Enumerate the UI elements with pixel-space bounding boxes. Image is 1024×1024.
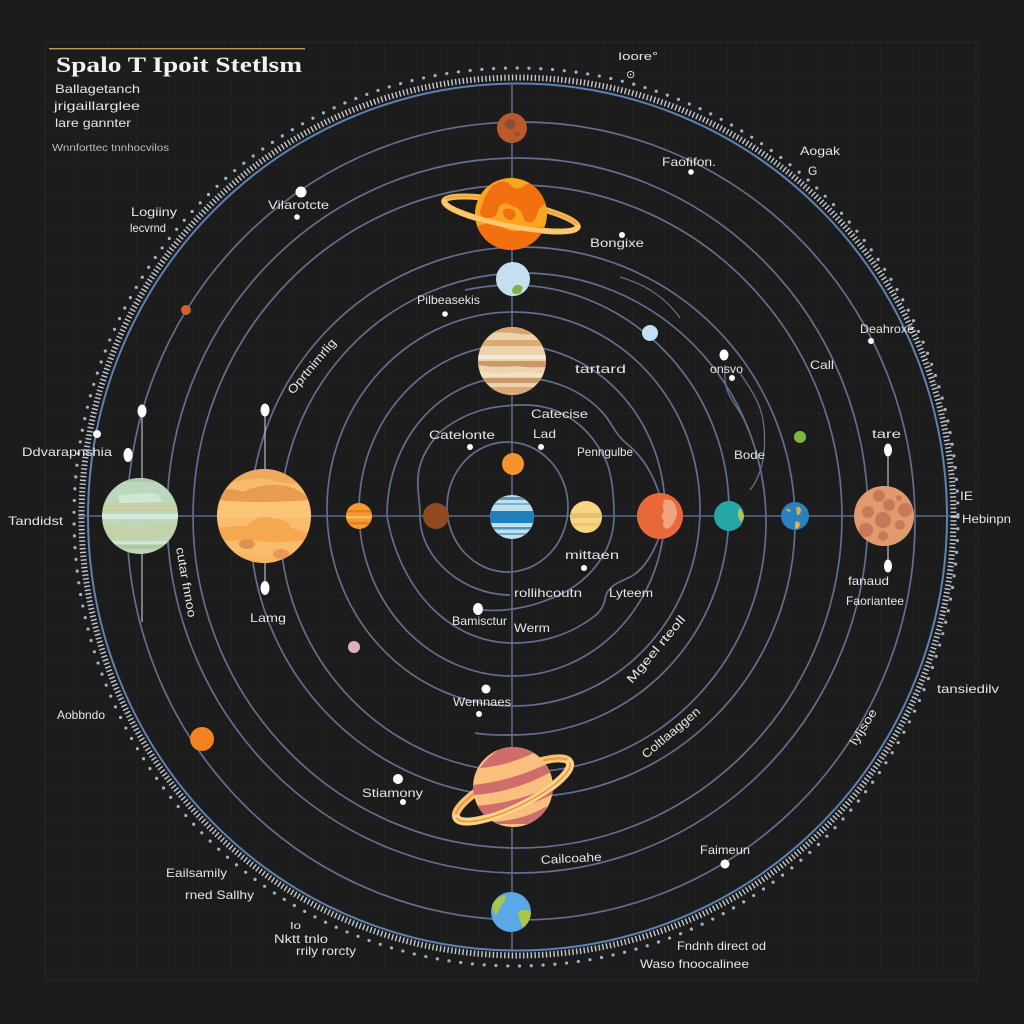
planet: pale yellow xyxy=(570,501,602,533)
planet and orbit labels: mittaen xyxy=(565,548,619,562)
planet: central blue xyxy=(490,495,534,539)
axis lines xyxy=(78,83,950,950)
planet: ringed sun xyxy=(442,178,580,253)
planet: ice xyxy=(496,262,530,296)
planet and orbit labels: Fndnh direct od xyxy=(677,939,766,953)
planet and orbit labels: tartard xyxy=(575,362,626,376)
subtitle: lare gannter xyxy=(55,116,131,130)
planet: banded tan xyxy=(478,327,546,395)
planet and orbit labels: Oprtnimrlig xyxy=(285,336,339,397)
planet and orbit labels: Logiiny xyxy=(131,205,177,219)
subtitle: Ballagetanch xyxy=(55,82,140,96)
planet and orbit labels: Waso fnoocalinee xyxy=(640,957,749,971)
planet and orbit labels: G xyxy=(808,164,817,178)
planet: striped orange xyxy=(346,503,372,529)
planet and orbit labels: Aobbndo xyxy=(57,708,105,722)
planet and orbit labels: Call xyxy=(810,358,834,372)
subtitle xyxy=(53,82,140,130)
planet: blue continents xyxy=(781,502,809,530)
planet and orbit labels: rollihcoutn xyxy=(514,586,582,600)
planet and orbit labels: Ddvarapnshia xyxy=(22,445,112,459)
planet and orbit labels: rrily rorcty xyxy=(296,944,356,958)
planet and orbit labels: Hebinpn xyxy=(962,512,1011,526)
planet and orbit labels: IE xyxy=(960,489,973,503)
planet and orbit labels: lecvrnd xyxy=(130,221,166,235)
planet and orbit labels: Penngulbe xyxy=(577,445,633,459)
planet and orbit labels: ⊙ xyxy=(626,69,635,81)
small bodies xyxy=(181,305,806,751)
planet and orbit labels: Wemnaes xyxy=(453,695,511,709)
planet and orbit labels: Vilarotcte xyxy=(268,198,329,212)
planet and orbit labels: fanaud xyxy=(848,574,889,588)
planet and orbit labels: Faofifon. xyxy=(662,155,716,169)
planet: teal xyxy=(714,501,744,531)
subtitle: jrigaillarglee xyxy=(53,99,140,113)
planet and orbit labels: Cailcoahe xyxy=(540,850,602,867)
planet and orbit labels: Tandidst xyxy=(8,514,64,528)
planet and orbit labels: Eailsamily xyxy=(166,866,227,880)
planet and orbit labels: Faoriantee xyxy=(846,594,904,608)
planet and orbit labels: Lad xyxy=(533,427,556,441)
planet and orbit labels: Deahroxe xyxy=(860,322,914,336)
outer orbit xyxy=(88,84,947,950)
title: Spalo T Ipoit Stetlsm xyxy=(56,52,302,77)
planet and orbit labels: Nktt tnlo xyxy=(274,932,328,946)
planet and orbit labels: Catecise xyxy=(531,407,588,421)
planet: pale green xyxy=(102,478,178,554)
planet and orbit labels: Werm xyxy=(514,621,550,635)
planet and orbit labels: Stiamony xyxy=(362,786,423,800)
planet: earth xyxy=(491,892,531,932)
planet: red orange xyxy=(637,493,683,539)
planet and orbit labels: Lamg xyxy=(250,611,286,625)
planet: jupiter xyxy=(217,469,311,566)
planet and orbit labels: onsvo xyxy=(710,362,743,376)
planet and orbit labels: Lyteem xyxy=(609,586,653,600)
wandering orbit paths xyxy=(620,277,765,490)
planet and orbit labels: Mgeel rteoll xyxy=(624,613,688,686)
planet and orbit labels: tansiedilv xyxy=(937,682,999,696)
planet and orbit labels: tare xyxy=(872,427,901,441)
planet and orbit labels: cutar fnnoo xyxy=(173,546,199,619)
planet and orbit labels: lyljsoe xyxy=(847,706,880,748)
planet: small orange xyxy=(502,453,524,475)
callout stems xyxy=(142,414,888,622)
caption: Wnnforttec tnnhocvilos xyxy=(52,142,169,154)
planet and orbit labels: Pilbeasekis xyxy=(417,293,480,307)
planet and orbit labels: Aogak xyxy=(800,144,841,158)
planet and orbit labels: Faimeun xyxy=(700,843,750,857)
planet and orbit labels: Ioore° xyxy=(618,51,658,63)
planet and orbit labels: Bongixe xyxy=(590,236,644,250)
planet and orbit labels: Io xyxy=(290,921,302,932)
orbit diagram xyxy=(74,68,958,966)
planet and orbit labels: Coltlaaggen xyxy=(639,704,703,761)
planet: ringed saturn xyxy=(452,747,574,827)
tick ring xyxy=(82,78,954,956)
planet and orbit labels: Catelonte xyxy=(429,428,495,442)
planet: mars xyxy=(497,113,527,143)
planet: brown xyxy=(423,503,449,529)
planet and orbit labels: Bamisctur xyxy=(452,614,507,628)
planet and orbit labels: Bode xyxy=(734,448,765,462)
planet and orbit labels: rned Sallhy xyxy=(185,888,254,902)
orbit rings xyxy=(127,122,915,920)
dotted outer ring xyxy=(74,68,958,966)
white markers xyxy=(93,169,892,868)
planet: rust speckled xyxy=(854,486,914,546)
